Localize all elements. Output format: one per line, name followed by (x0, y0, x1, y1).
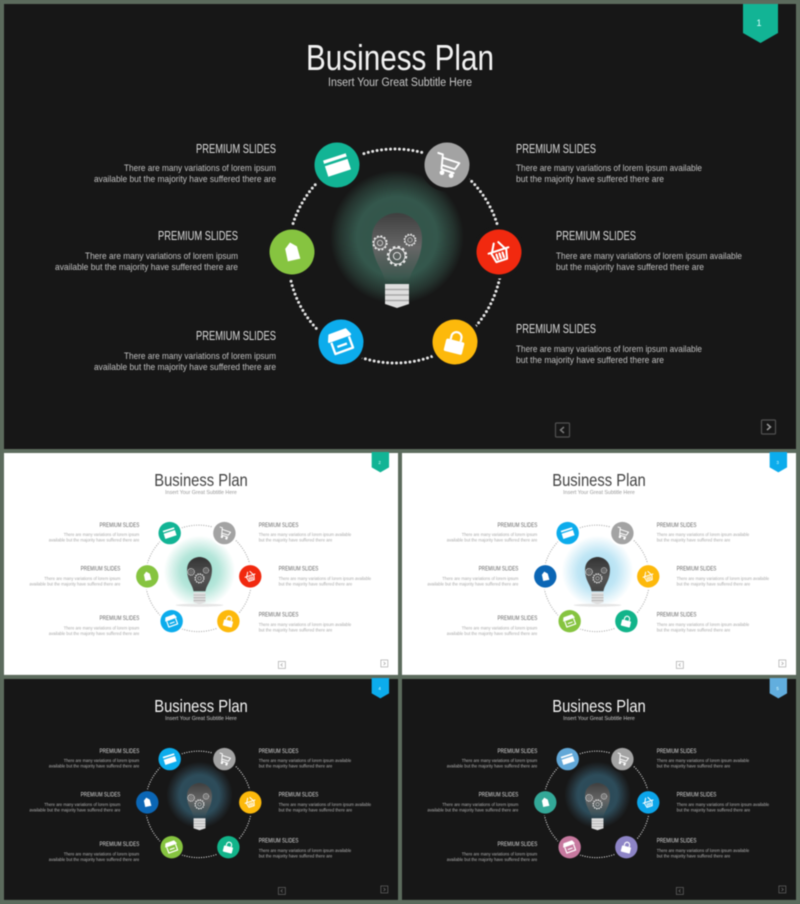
slide 4 text blocks: but the majority have suffered there are (259, 854, 333, 860)
slide 2 page badge (372, 452, 389, 472)
slide 4: dark slide, blue badge (4, 678, 398, 900)
slide 5 text blocks: PREMIUM SLIDES (657, 838, 697, 845)
slide 5 text blocks: PREMIUM SLIDES (479, 791, 518, 798)
slide 3 text blocks: but the majority have suffered there are (657, 538, 731, 544)
slide 4 title: Business Plan (154, 696, 248, 716)
slide 2 text blocks: There are many variations of lorem ipsum available (259, 622, 352, 628)
slide 5: dark slide, pastel palette (402, 678, 796, 900)
slide 5 icons (534, 748, 659, 858)
slide 4 text blocks (29, 748, 371, 863)
slide 2 light bulb (176, 557, 223, 607)
icon: shopping cart (424, 142, 470, 188)
text block: top right: PREMIUM SLIDES (516, 142, 596, 156)
slide 2: white slide, teal badge (4, 452, 398, 675)
slide 4 text blocks: PREMIUM SLIDES (259, 838, 299, 845)
slide 3 text blocks: There are many variations of lorem ipsum available (657, 532, 750, 538)
slide 5 text blocks: PREMIUM SLIDES (498, 748, 537, 755)
slide 2 subtitle: Insert Your Great Subtitle Here (165, 490, 237, 496)
slide 4 subtitle: Insert Your Great Subtitle Here (165, 716, 237, 722)
slide 4 background (4, 679, 398, 900)
slide 4 text blocks: There are many variations of lorem ipsum available (259, 848, 352, 854)
icon: storefront (318, 320, 364, 364)
slide 3 central glow (562, 536, 633, 607)
slide 4 text blocks: but the majority have suffered there are (279, 807, 353, 813)
text block: middle left (55, 229, 238, 273)
slide 5 text blocks: but the majority have suffered there are (657, 854, 731, 860)
slide 2 page badge: 2 (378, 460, 381, 465)
slide 1 page badge (743, 4, 778, 43)
text block: middle left: There are many variations of lorem ipsum (85, 251, 238, 262)
slide 5 text blocks: There are many variations of lorem ipsum (462, 758, 537, 764)
slide 1: large dark slide (4, 4, 796, 449)
text block: middle right (556, 229, 742, 273)
slide 2 text blocks: PREMIUM SLIDES (81, 565, 120, 572)
text block: bottom left: PREMIUM SLIDES (196, 329, 276, 343)
slide 5 dotted ring (543, 751, 650, 858)
next arrow button (762, 420, 776, 434)
slide 4 dotted ring (145, 751, 252, 858)
slide 3 text blocks: PREMIUM SLIDES (498, 615, 537, 622)
text block: middle right: but the majority have suffered there are (556, 262, 704, 273)
slide 3 text blocks: PREMIUM SLIDES (677, 565, 716, 572)
slide 1 background (4, 4, 796, 449)
slide 2 text blocks: PREMIUM SLIDES (259, 522, 299, 529)
slide 4 page badge (372, 678, 389, 698)
text block: middle left: PREMIUM SLIDES (158, 229, 238, 243)
previous arrow button (556, 423, 570, 437)
slide 5 text blocks: available but the majority have suffered there are (447, 764, 538, 770)
slide 3 text blocks: There are many variations of lorem ipsum (462, 626, 537, 632)
slide 2 background (4, 453, 398, 675)
slide 3 icons (534, 522, 659, 632)
text block: top right (516, 142, 702, 185)
slide 3 text blocks: PREMIUM SLIDES (657, 612, 697, 619)
text block: bottom left: available but the majority have suffered there are (94, 362, 276, 373)
slide 1 dotted ring (288, 149, 502, 363)
slide 5 light bulb (585, 783, 610, 830)
slide 2 arrow buttons (278, 660, 388, 668)
slide 5 text blocks: PREMIUM SLIDES (498, 841, 537, 848)
slide 5 text blocks: There are many variations of lorem ipsum available (657, 848, 750, 854)
text block: top left: There are many variations of lorem ipsum (124, 163, 276, 174)
text block: bottom right (516, 322, 702, 366)
slide 2 text blocks (29, 522, 371, 637)
slide 4 text blocks: There are many variations of lorem ipsum (64, 758, 139, 764)
slide 5 subtitle: Insert Your Great Subtitle Here (563, 716, 635, 722)
slide 2 text blocks: There are many variations of lorem ipsum available (259, 532, 352, 538)
slide 5 background (402, 679, 796, 900)
slide 3 background (402, 453, 796, 675)
slide 4 text blocks: but the majority have suffered there are (259, 764, 333, 770)
slide 2 central glow (164, 536, 235, 607)
text block: bottom right: but the majority have suffered there are (516, 355, 664, 366)
slide 4 text blocks: There are many variations of lorem ipsum available (259, 758, 352, 764)
slide 4 text blocks: available but the majority have suffered there are (29, 807, 121, 813)
text block: bottom left: There are many variations of lorem ipsum (124, 351, 276, 362)
text block: top left: available but the majority have suffered there are (94, 174, 276, 185)
slide 4 page badge: 4 (378, 686, 381, 691)
slide 1 central glow (330, 170, 464, 304)
text block: bottom left (94, 329, 276, 373)
slide 1 light bulb (372, 213, 422, 308)
slide 5 text blocks: There are many variations of lorem ipsum available (657, 758, 750, 764)
slide 3 subtitle: Insert Your Great Subtitle Here (563, 490, 635, 496)
slide 5 text blocks: There are many variations of lorem ipsum (442, 802, 518, 808)
slide 2 text blocks: There are many variations of lorem ipsum (64, 532, 139, 538)
slide 2 text blocks: PREMIUM SLIDES (259, 612, 299, 619)
text block: top right: There are many variations of lorem ipsum available (516, 163, 702, 174)
slide 5 page badge (770, 678, 787, 698)
slide 2 text blocks: PREMIUM SLIDES (100, 615, 139, 622)
slide 5 text blocks: available but the majority have suffered there are (427, 807, 519, 813)
slide 4 text blocks: available but the majority have suffered there are (49, 857, 140, 863)
slide 3 title: Business Plan (552, 470, 646, 490)
text block: middle left: available but the majority have suffered there are (55, 262, 238, 273)
slide 2 icons (136, 522, 261, 632)
slide 2 dotted ring (145, 525, 252, 632)
slide 3 text blocks: available but the majority have suffered there are (427, 581, 519, 587)
slide 3 page badge (770, 452, 787, 472)
slide 5 text blocks (427, 748, 769, 863)
slide 4 text blocks: PREMIUM SLIDES (259, 748, 299, 755)
text block: top right: but the majority have suffered there are (516, 174, 664, 185)
slide 3 text blocks: There are many variations of lorem ipsum available (677, 576, 769, 582)
slide 2 text blocks: PREMIUM SLIDES (100, 522, 139, 529)
slide 2 text blocks: but the majority have suffered there are (259, 628, 333, 634)
slide 4 central glow (166, 762, 233, 828)
slide 3 text blocks: available but the majority have suffered there are (447, 538, 538, 544)
icon: price tag (270, 230, 314, 274)
icon: basket (476, 230, 522, 274)
slide 2 text blocks: There are many variations of lorem ipsum available (279, 576, 371, 582)
slide 1 page badge: 1 (756, 18, 762, 28)
text block: bottom right: There are many variations of lorem ipsum available (516, 344, 702, 355)
slide 3 arrow buttons (676, 660, 786, 668)
slide 4 light bulb (187, 783, 212, 830)
slide 3 text blocks: PREMIUM SLIDES (657, 522, 697, 529)
slide 5 text blocks: but the majority have suffered there are (657, 764, 731, 770)
slide 5 page badge: 5 (776, 686, 779, 691)
slide 2 text blocks: but the majority have suffered there are (259, 538, 333, 544)
slide 3 text blocks: PREMIUM SLIDES (498, 522, 537, 529)
slide 1 subtitle: Insert Your Great Subtitle Here (328, 77, 472, 89)
text block: top left: PREMIUM SLIDES (196, 142, 276, 156)
icon: padlock (432, 320, 478, 364)
slide 5 text blocks: available but the majority have suffered there are (447, 857, 538, 863)
slide 5 text blocks: There are many variations of lorem ipsum available (677, 802, 769, 808)
slide 3: white slide, blue badge (402, 452, 796, 675)
slide 3 text blocks (427, 522, 769, 637)
text block: middle right: There are many variations of lorem ipsum available (556, 251, 742, 262)
slide 3 text blocks: but the majority have suffered there are (677, 581, 751, 587)
icon: credit card (314, 142, 360, 188)
slide 1 title: Business Plan (306, 37, 494, 78)
slide 4 text blocks: PREMIUM SLIDES (279, 791, 318, 798)
slide 5 title: Business Plan (552, 696, 646, 716)
slide 4 text blocks: PREMIUM SLIDES (100, 748, 139, 755)
slide 5 text blocks: There are many variations of lorem ipsum (462, 852, 537, 858)
slide 3 text blocks: There are many variations of lorem ipsum available (657, 622, 750, 628)
slide 4 text blocks: PREMIUM SLIDES (81, 791, 120, 798)
slide 4 text blocks: PREMIUM SLIDES (100, 841, 139, 848)
slide 5 arrow buttons (676, 886, 786, 894)
slide 2 text blocks: There are many variations of lorem ipsum (64, 626, 139, 632)
slide 3 text blocks: There are many variations of lorem ipsum (462, 532, 537, 538)
text block: bottom right: PREMIUM SLIDES (516, 322, 596, 336)
slide 5 central glow (564, 762, 631, 828)
slide 2 text blocks: available but the majority have suffered there are (49, 538, 140, 544)
slide 2 text blocks: There are many variations of lorem ipsum (44, 576, 120, 582)
slide 3 text blocks: There are many variations of lorem ipsum (442, 576, 518, 582)
text block: middle right: PREMIUM SLIDES (556, 229, 636, 243)
slide 4 text blocks: There are many variations of lorem ipsum (64, 852, 139, 858)
text block: top left (94, 142, 276, 185)
slide 2 title: Business Plan (154, 470, 248, 490)
slide 2 text blocks: but the majority have suffered there are (279, 581, 353, 587)
slide 3 page badge: 3 (776, 460, 779, 465)
slide 4 icons (136, 748, 261, 858)
slide 5 text blocks: PREMIUM SLIDES (677, 791, 716, 798)
slide 5 text blocks: PREMIUM SLIDES (657, 748, 697, 755)
slide 3 text blocks: but the majority have suffered there are (657, 628, 731, 634)
slide 5 text blocks: but the majority have suffered there are (677, 807, 751, 813)
slide 3 text blocks: available but the majority have suffered there are (447, 631, 538, 637)
slide 2 text blocks: PREMIUM SLIDES (279, 565, 318, 572)
slide 3 light bulb (574, 557, 621, 607)
slide 2 text blocks: available but the majority have suffered there are (29, 581, 121, 587)
slide 4 text blocks: available but the majority have suffered there are (49, 764, 140, 770)
slide 3 text blocks: PREMIUM SLIDES (479, 565, 518, 572)
slide 4 arrow buttons (278, 886, 388, 894)
slide 2 text blocks: available but the majority have suffered there are (49, 631, 140, 637)
slide 4 text blocks: There are many variations of lorem ipsum available (279, 802, 371, 808)
slide 3 dotted ring (543, 525, 650, 632)
slide 4 text blocks: There are many variations of lorem ipsum (44, 802, 120, 808)
